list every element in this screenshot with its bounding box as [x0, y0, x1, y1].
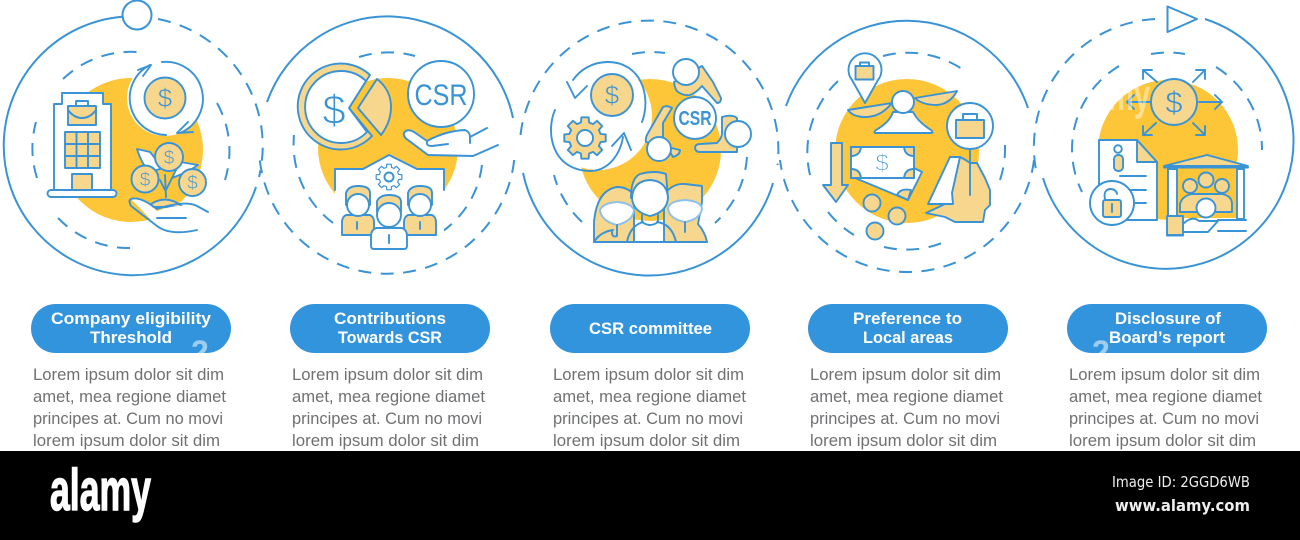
- alamy logo: alamy: [50, 458, 151, 523]
- image ID: Image ID: 2GGD6WB: [1112, 473, 1250, 491]
- yellow disc 1: [59, 78, 203, 222]
- text block 5: amet, mea regione diamet: [1069, 387, 1262, 406]
- footer bar: [0, 451, 1300, 540]
- label pill: disclosure of board's report: 2: [1092, 334, 1110, 370]
- icon: house with gear and team: [335, 155, 444, 250]
- label pill: contributions towards CSR: [290, 304, 490, 353]
- text block 1: Lorem ipsum dolor sit dim: [33, 365, 224, 384]
- icon: location pin with briefcase: [849, 53, 882, 103]
- yellow disc 3: [579, 79, 721, 221]
- label pill: disclosure of board's report: [1067, 304, 1267, 353]
- label pill: contributions towards CSR: Contributions: [334, 309, 446, 328]
- text block 4: [810, 365, 1003, 450]
- icon: people around CSR: CSR: [678, 108, 712, 130]
- text block 1: principes at. Cum no movi: [33, 409, 223, 428]
- panel: contributions towards CSR: [260, 16, 514, 274]
- icon: hand with money plant: $: [187, 173, 198, 194]
- text block 1: [33, 365, 226, 450]
- text block 3: amet, mea regione diamet: [553, 387, 746, 406]
- text block 4: principes at. Cum no movi: [810, 409, 1000, 428]
- arrow marker: [1168, 6, 1197, 32]
- label pill: company eligibility threshold: Company eligibility: [51, 309, 212, 328]
- label pill: CSR committee: [550, 304, 750, 353]
- text block 2: amet, mea regione diamet: [292, 387, 485, 406]
- panel: preference to local areas: [780, 21, 1034, 272]
- label pill: CSR committee: CSR committee: [589, 319, 712, 338]
- outer ring 1: [4, 0, 263, 275]
- text block 1: amet, mea regione diamet: [33, 387, 226, 406]
- icon: board building with people: [1164, 155, 1250, 236]
- text block 5: principes at. Cum no movi: [1069, 409, 1259, 428]
- text block 4: lorem ipsum dolor sit dim: [810, 431, 997, 450]
- inner dashed ring 4: [807, 53, 1005, 250]
- text block 2: lorem ipsum dolor sit dim: [292, 431, 479, 450]
- icon: hand with money plant: $: [140, 170, 151, 191]
- label pill: preference to local areas: Local areas: [863, 328, 953, 347]
- label pill: disclosure of board's report: Board’s report: [1109, 328, 1225, 347]
- label pill: preference to local areas: [808, 304, 1008, 353]
- yellow disc 5: [1098, 80, 1238, 220]
- label pill: company eligibility threshold: [31, 304, 231, 353]
- inner dashed ring 2: [294, 52, 482, 231]
- icon: hand with money plant: $: [164, 148, 175, 169]
- icon: people around CSR: [646, 59, 751, 161]
- icon: money and gear cycle: [544, 62, 652, 171]
- text block 5: Lorem ipsum dolor sit dim: [1069, 365, 1260, 384]
- watermark fragment: my: [1108, 71, 1150, 120]
- text block 2: [292, 365, 485, 450]
- icon: circular money arrows: [127, 60, 203, 136]
- inner dashed ring 5: [1072, 52, 1262, 192]
- icon: pie chart coin: $: [322, 86, 346, 133]
- icon: committee group: [594, 172, 707, 242]
- outer ring 2: [260, 16, 514, 274]
- label pill: preference to local areas: Preference to: [853, 309, 962, 328]
- yellow disc 4: [835, 79, 979, 223]
- icon: hand holding briefcase sign: [926, 103, 993, 222]
- text block 2: principes at. Cum no movi: [292, 409, 482, 428]
- icon: pie chart coin: [298, 63, 391, 149]
- label pill: contributions towards CSR: Towards CSR: [338, 328, 442, 347]
- icon: office building: [48, 93, 116, 197]
- outer ring 4: [780, 21, 1034, 272]
- text block 3: lorem ipsum dolor sit dim: [553, 431, 740, 450]
- icon: information document with lock: [1090, 140, 1157, 225]
- panel: disclosure of board's report: [1034, 6, 1293, 269]
- yellow disc 2: [318, 78, 458, 218]
- icon: circular money arrows: $: [158, 83, 173, 113]
- label pill: company eligibility threshold: 2: [191, 334, 209, 370]
- label pill: company eligibility threshold: Threshold: [90, 328, 172, 347]
- text block 3: principes at. Cum no movi: [553, 409, 743, 428]
- inner dashed ring 3: [554, 52, 747, 223]
- text block 4: Lorem ipsum dolor sit dim: [810, 365, 1001, 384]
- outer ring 5: [1034, 19, 1293, 269]
- outer ring 3: [520, 21, 778, 276]
- icon: money and gear cycle: $: [605, 80, 620, 110]
- text block 4: amet, mea regione diamet: [810, 387, 1003, 406]
- label pill: disclosure of board's report: Disclosure of: [1115, 309, 1221, 328]
- icon: banknotes and coins: [851, 147, 922, 240]
- text block 2: Lorem ipsum dolor sit dim: [292, 365, 483, 384]
- text block 5: [1069, 365, 1262, 450]
- panel: CSR committee: [520, 21, 778, 276]
- text block 3: [553, 365, 746, 450]
- icon: dollar with radiating arrows: $: [1165, 85, 1183, 120]
- website: www.alamy.com: [1115, 496, 1250, 515]
- text block 5: lorem ipsum dolor sit dim: [1069, 431, 1256, 450]
- icon: balance scale: [848, 91, 957, 133]
- icon: hand with money plant: [130, 143, 208, 232]
- icon: dollar with radiating arrows: [1127, 70, 1222, 135]
- text block 1: lorem ipsum dolor sit dim: [33, 431, 220, 450]
- icon: down arrow: [823, 143, 848, 202]
- icon: banknotes and coins: $: [875, 150, 889, 177]
- text block 3: Lorem ipsum dolor sit dim: [553, 365, 744, 384]
- inner dashed ring 1: [32, 52, 229, 248]
- icon: CSR coin on hand: [404, 61, 498, 156]
- panel: company eligibility threshold: [4, 0, 263, 275]
- icon: CSR coin on hand: CSR: [414, 79, 468, 112]
